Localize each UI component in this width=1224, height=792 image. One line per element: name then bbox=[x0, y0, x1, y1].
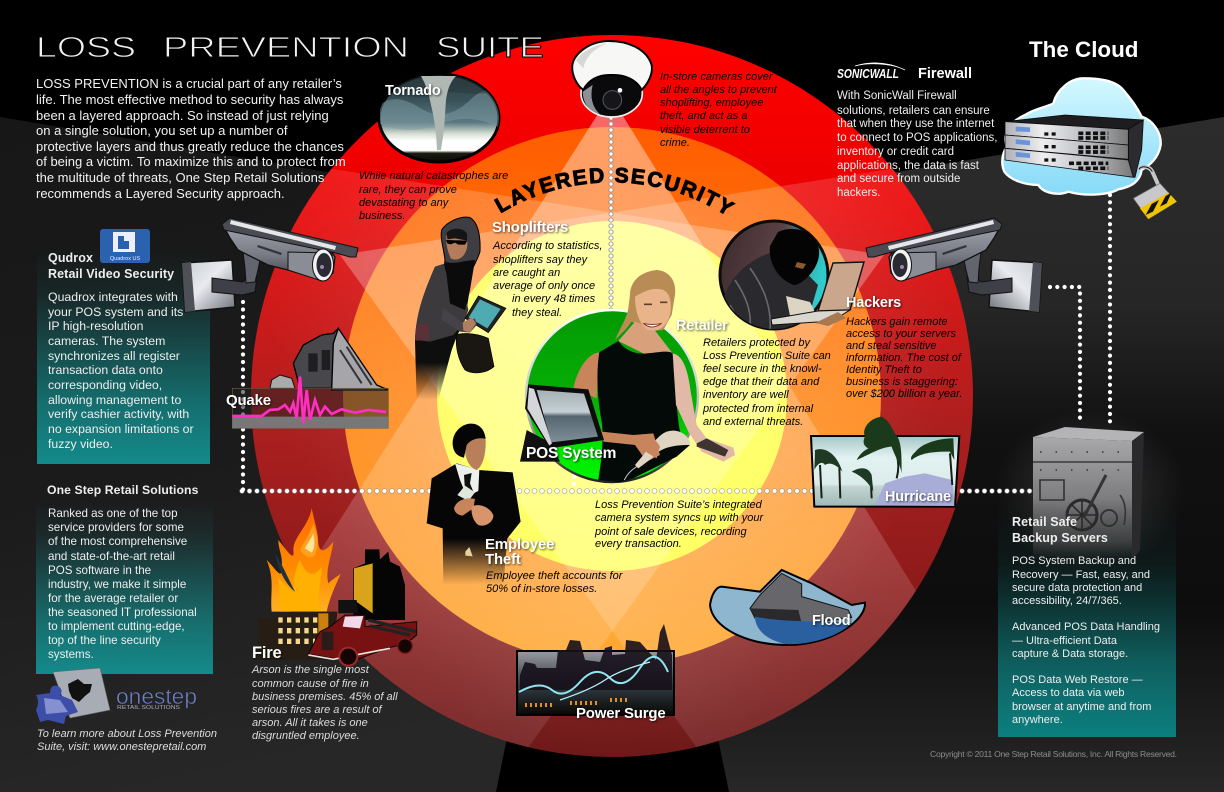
intro paragraph: on a single solution, you set up a number of bbox=[36, 123, 288, 138]
text: quadrox body: verify cashier activity, with bbox=[48, 407, 189, 421]
text: backup body: accessibility, 24/7/365. bbox=[1012, 595, 1122, 607]
icon: hurricane bbox=[811, 417, 959, 507]
text: sonicwall body: solutions, retailers can ensure bbox=[837, 105, 990, 117]
heading: POS system: POS System bbox=[526, 445, 616, 462]
text: hackers: information. The cost of bbox=[846, 352, 962, 364]
text: one step body: Ranked as one of the top bbox=[48, 507, 178, 520]
heading: the cloud: The Cloud bbox=[1029, 37, 1138, 62]
text: quadrox body: your POS system and its bbox=[48, 305, 183, 319]
text: retailers: and external threats. bbox=[703, 416, 803, 428]
text: backup body: POS Data Web Restore — bbox=[1012, 674, 1143, 686]
text: fire: Arson is the single most bbox=[251, 664, 370, 676]
intro paragraph: recommends a Layered Security approach. bbox=[36, 186, 285, 201]
text: natural catastrophes: rare, they can prove bbox=[359, 184, 457, 196]
intro paragraph: LOSS PREVENTION is a crucial part of any retailer’s bbox=[36, 76, 342, 91]
heading: shoplifters: Shoplifters bbox=[492, 219, 568, 236]
text: backup body: Recovery — Fast, easy, and bbox=[1012, 569, 1150, 581]
heading: employee theft: Employee bbox=[485, 536, 554, 553]
text: learn more: To learn more about Loss Prevention bbox=[37, 728, 217, 740]
text: quadrox body: cameras. The system bbox=[48, 334, 165, 348]
text: sonicwall body: that when they use the internet bbox=[837, 118, 995, 130]
text: integrated camera system: point of sale devices, recording bbox=[594, 526, 748, 538]
panel: one step retail solutions bbox=[36, 483, 213, 674]
text: shoplifters: are caught an bbox=[493, 267, 560, 279]
heading: retailer: Retailer bbox=[676, 318, 728, 334]
text: natural catastrophes: business. bbox=[359, 210, 405, 222]
text: learn more: Suite, visit: www.onestepretail.com bbox=[37, 741, 206, 753]
icon: power surge bbox=[517, 624, 674, 715]
text: hackers: business is staggering: bbox=[846, 376, 958, 388]
text: shoplifters: they steal. bbox=[512, 307, 562, 319]
icon: dome camera bbox=[572, 41, 652, 117]
logo: sonicwall: SONICWALL bbox=[837, 67, 899, 81]
text: hackers: access to your servers bbox=[846, 328, 957, 340]
text: employee theft: Employee theft accounts for bbox=[486, 570, 624, 582]
icon: server stack bbox=[1005, 115, 1143, 177]
text: sonicwall body: inventory or credit card bbox=[837, 146, 954, 158]
text: retailers: Retailers protected by bbox=[703, 337, 811, 349]
icon: tornado bbox=[379, 74, 500, 162]
text: one step body: for the average retailer or bbox=[48, 592, 178, 605]
text: in-store cameras: In-store cameras cover bbox=[660, 71, 774, 83]
text: one step body: industry, we make it simple bbox=[48, 578, 186, 591]
text: in-store cameras: shoplifting, employee bbox=[660, 97, 763, 109]
text: hackers: Identity Theft to bbox=[846, 364, 922, 376]
text: backup body: POS System Backup and bbox=[1012, 555, 1136, 567]
text: fire: serious fires are a result of bbox=[252, 704, 383, 716]
intro paragraph: the multitude of threats, One Step Retail Solutions bbox=[36, 170, 325, 185]
intro paragraph: been a layered approach. So instead of just relying bbox=[36, 108, 329, 123]
text: sonicwall body: to connect to POS applications, bbox=[837, 132, 997, 144]
text: one step body: of the most comprehensive bbox=[48, 535, 187, 548]
text: integrated camera system: every transaction. bbox=[595, 538, 682, 550]
logo: onestep puzzle bbox=[36, 668, 197, 724]
safe glow bbox=[995, 410, 1185, 570]
text: one step body: top of the line security bbox=[48, 634, 161, 647]
text: hackers: and steal sensitive bbox=[846, 340, 936, 352]
icon: safe bbox=[1033, 427, 1144, 560]
text: employee theft: 50% of in-store losses. bbox=[486, 583, 597, 595]
heading: quadrox: Retail Video Security bbox=[48, 267, 174, 281]
camera light beams bbox=[251, 115, 973, 757]
heading: employee theft: Theft bbox=[485, 551, 521, 568]
text: quadrox body: allowing management to bbox=[48, 393, 181, 407]
text: fire: business premises. 45% of all bbox=[252, 691, 398, 703]
copyright: Copyright © 2011 One Step Retail Solutions, Inc. All Rights Reserved. bbox=[930, 749, 1177, 759]
text: retailers: Loss Prevention Suite can bbox=[703, 350, 831, 362]
text: in-store cameras: crime. bbox=[660, 137, 690, 149]
icon: padlock bbox=[1133, 167, 1177, 219]
text: quadrox body: IP high-resolution bbox=[48, 319, 144, 333]
layered security arched heading: LAYERED SECURITY bbox=[494, 167, 736, 214]
heading: one step: One Step Retail Solutions bbox=[47, 483, 199, 497]
icon: employee bbox=[427, 424, 521, 585]
heading: quadrox: Qudrox bbox=[48, 251, 93, 265]
icon: laptop bbox=[771, 262, 864, 326]
heading: hackers: Hackers bbox=[846, 295, 901, 311]
text: shoplifters: average of only once bbox=[493, 280, 595, 292]
text: quadrox body: fuzzy video. bbox=[48, 437, 113, 451]
label: flood: Flood bbox=[812, 613, 850, 629]
heading: retail safe: Retail Safe bbox=[1012, 515, 1077, 529]
logo: quadrox: Quadrox US bbox=[110, 256, 140, 262]
text: hackers: over $200 billion a year. bbox=[846, 388, 962, 400]
icon: shoplifter bbox=[415, 217, 506, 400]
logo: quadrox bbox=[100, 229, 150, 263]
text: retailers: protected from internal bbox=[702, 403, 814, 415]
text: backup body: Advanced POS Data Handling bbox=[1012, 621, 1160, 633]
text: natural catastrophes: devastating to any bbox=[359, 197, 450, 209]
text: retailers: inventory are well bbox=[703, 389, 789, 401]
icon: flood and hurricane art bbox=[710, 417, 959, 645]
heading: firewall: Firewall bbox=[918, 66, 972, 82]
text: one step body: systems. bbox=[48, 648, 94, 661]
label: power surge: Power Surge bbox=[576, 705, 666, 722]
icon: left security camera bbox=[182, 218, 358, 312]
text: sonicwall body: applications, the data is fast bbox=[837, 160, 980, 172]
wordmark: retail solutions: RETAIL SOLUTIONS bbox=[117, 705, 180, 711]
text: integrated camera system: camera system syncs up with your bbox=[595, 512, 764, 524]
title: PREVENTION bbox=[163, 32, 409, 64]
text: quadrox body: synchronizes all register bbox=[48, 349, 180, 363]
icon: hacker bbox=[720, 221, 864, 330]
text: in-store cameras: theft, and act as a bbox=[660, 110, 747, 122]
panel: quadrox bbox=[37, 229, 210, 464]
text: backup body: secure data protection and bbox=[1012, 582, 1142, 594]
text: quadrox body: Quadrox integrates with bbox=[48, 290, 178, 304]
text: quadrox body: transaction data onto bbox=[48, 363, 163, 377]
text: fire: disgruntled employee. bbox=[252, 730, 360, 742]
text: shoplifters: According to statistics, bbox=[492, 240, 602, 252]
text: quadrox body: corresponding video, bbox=[48, 378, 162, 392]
text: shoplifters: in every 48 times bbox=[512, 293, 596, 305]
panel: retail safe backup servers bbox=[995, 410, 1185, 737]
icon: quake bbox=[232, 328, 388, 428]
icon: fire bbox=[258, 508, 417, 666]
text: one step body: the seasoned IT professional bbox=[48, 606, 197, 619]
icon: POS terminal bbox=[520, 384, 604, 462]
icon: right security camera bbox=[866, 218, 1042, 312]
text: backup body: anywhere. bbox=[1012, 714, 1063, 726]
intro paragraph: of being a victim. To maximize this and to protect from bbox=[36, 154, 346, 169]
text: backup body: browser at anytime and from bbox=[1012, 701, 1151, 713]
text: fire: common cause of fire in bbox=[252, 678, 369, 690]
text: fire: arson. All it takes is one bbox=[252, 717, 368, 729]
icon: retailer in green circle bbox=[526, 270, 735, 482]
icon: fire truck bbox=[308, 615, 417, 666]
text: one step body: POS software in the bbox=[48, 564, 151, 577]
text: one step body: service providers for some bbox=[48, 521, 184, 534]
text: in-store cameras: all the angles to prevent bbox=[660, 84, 778, 96]
text: one step body: to implement cutting-edge, bbox=[48, 620, 185, 633]
text: backup body: Access to data via web bbox=[1012, 687, 1125, 699]
dotted connection lines bbox=[242, 118, 1110, 491]
text: quadrox body: no expansion limitations or bbox=[48, 422, 194, 436]
text: retailers: edge that their data and bbox=[703, 376, 820, 388]
intro paragraph: life. The most effective method to security has always bbox=[36, 92, 344, 107]
heading: fire: Fire bbox=[252, 644, 281, 662]
heading: tornado: Tornado bbox=[385, 83, 441, 99]
text: retailers: feel secure in the knowl- bbox=[703, 363, 822, 375]
title: LOSS bbox=[36, 32, 136, 64]
icon: flood bbox=[710, 570, 865, 645]
text: shoplifters: shoplifters say they bbox=[493, 254, 589, 266]
text: sonicwall body: With SonicWall Firewall bbox=[837, 90, 957, 102]
text: sonicwall body: and secure from outside bbox=[837, 173, 960, 185]
intro paragraph: protective layers and thus greatly reduce the chances bbox=[36, 139, 344, 154]
text: hackers: Hackers gain remote bbox=[846, 316, 948, 328]
text: natural catastrophes: While natural catastrophes are bbox=[359, 170, 508, 182]
text: backup body: capture & Data storage. bbox=[1012, 648, 1128, 660]
text: integrated camera system: Loss Prevention Suite’s integrated bbox=[595, 499, 763, 511]
title: SUITE bbox=[436, 32, 544, 64]
label: quake: Quake bbox=[226, 392, 271, 409]
label: hurricane: Hurricane bbox=[885, 489, 951, 505]
concentric security rings bbox=[251, 35, 973, 757]
text: one step body: and state-of-the-art retail bbox=[48, 550, 175, 563]
wordmark: onestep: onestep bbox=[116, 684, 197, 709]
text: sonicwall body: hackers. bbox=[837, 187, 880, 199]
icon: cloud with servers bbox=[1002, 78, 1177, 219]
text: backup body: — Ultra-efficient Data bbox=[1012, 635, 1118, 647]
text: in-store cameras: visible deterrent to bbox=[660, 124, 750, 136]
heading: retail safe: Backup Servers bbox=[1012, 531, 1108, 545]
